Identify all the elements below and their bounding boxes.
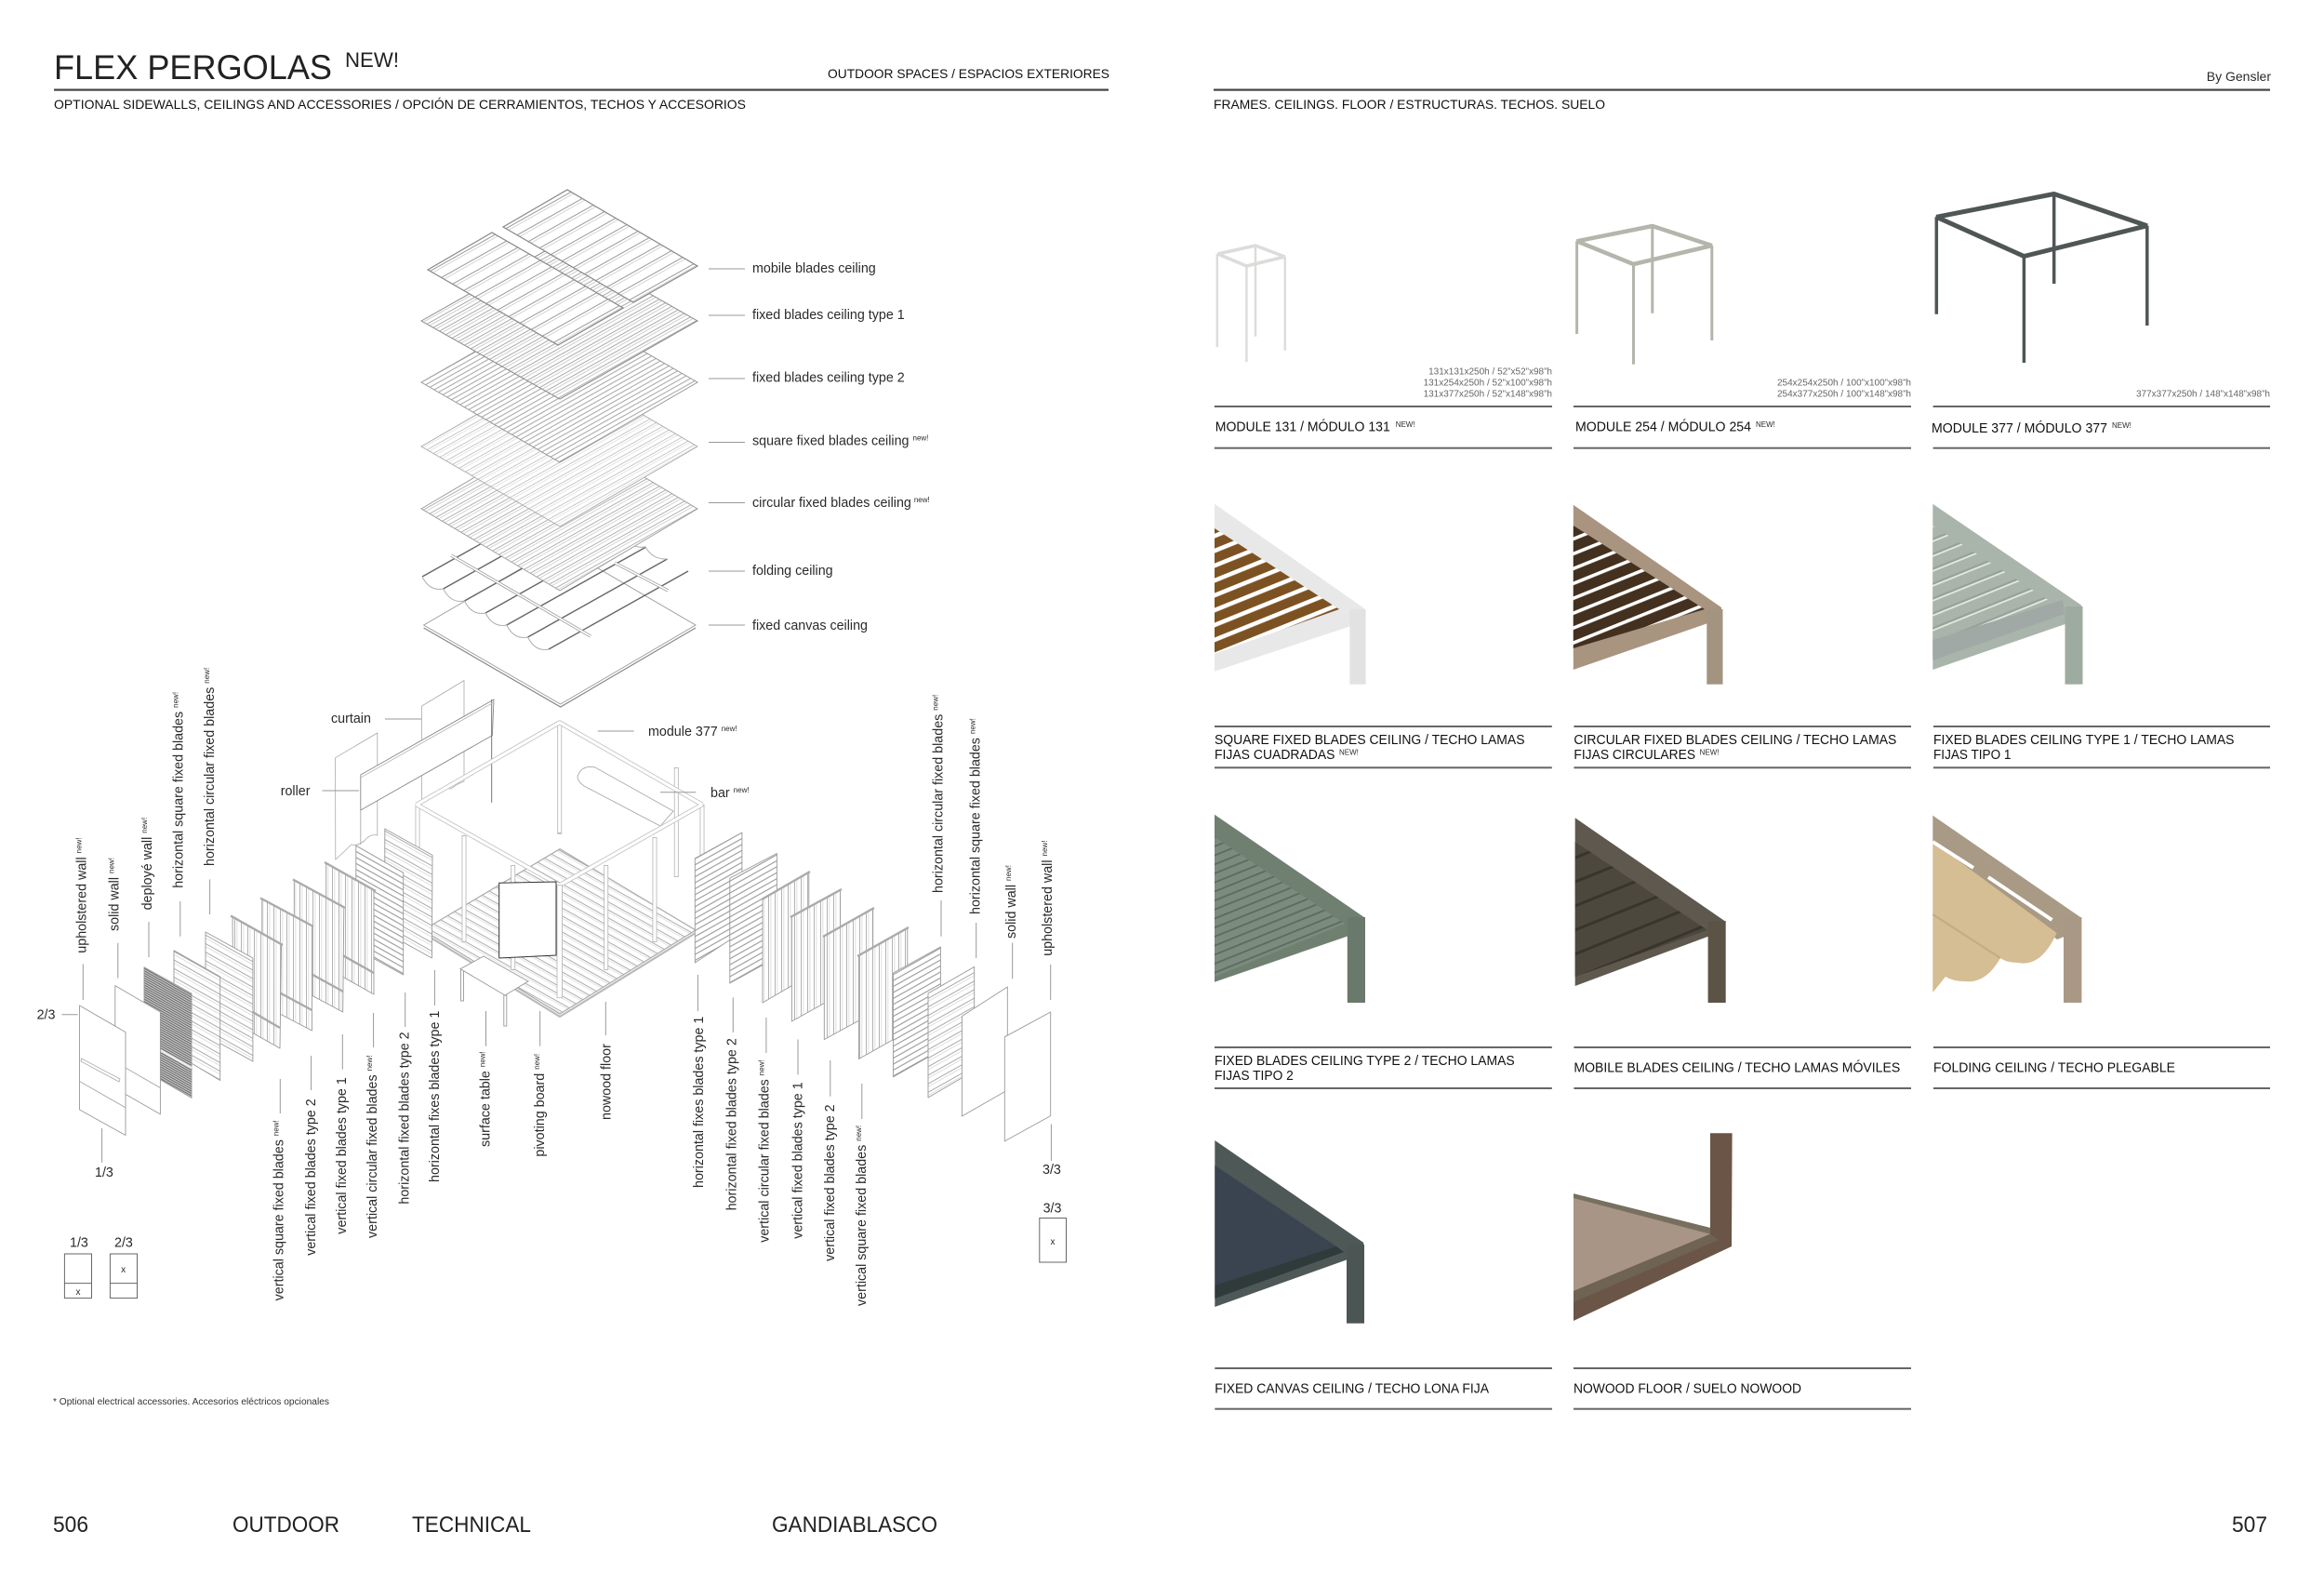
label: vertical fixed blades type 2: vertical fixed blades type 2 <box>304 1099 319 1256</box>
label: bar: bar <box>710 786 730 801</box>
surface table <box>460 956 528 1026</box>
page number 506: 506 <box>53 1512 88 1538</box>
front post <box>557 886 562 998</box>
rear posts <box>418 723 702 970</box>
pergola module with floor and accessories <box>336 681 702 1026</box>
nowood floor card <box>1574 1133 1911 1410</box>
wall position legend <box>64 1202 1066 1299</box>
folding ceiling card <box>1932 816 2270 1089</box>
label: horizontal square fixed blades: new! <box>969 718 976 734</box>
module 254 card <box>1574 225 1911 449</box>
square fixed blades ceiling card <box>1215 504 1552 768</box>
label: horizontal circular fixed blades: new! <box>931 695 939 711</box>
fixed blades ceiling type 2 plate <box>421 303 697 462</box>
designer credit: By Gensler <box>2207 69 2271 84</box>
label: circular fixed blades ceiling: new! <box>914 496 930 504</box>
rules <box>1933 406 2270 449</box>
label: module 377: module 377 <box>648 725 718 739</box>
label: vertical square fixed blades: new! <box>855 1125 863 1141</box>
label: solid wall: new! <box>108 858 116 873</box>
caption: FIXED BLADES CEILING TYPE 2 / TECHO LAMAS <box>1215 1054 1515 1069</box>
label: surface table: surface table <box>479 1071 494 1147</box>
vertical circular fixed blades panel <box>325 862 376 994</box>
roller <box>361 699 494 845</box>
label: vertical circular fixed blades: vertical circular fixed blades <box>365 1074 380 1238</box>
left wall labels <box>37 668 548 1300</box>
label: 2/3: 2/3 <box>37 1008 56 1023</box>
legend 2/3 <box>110 1235 138 1299</box>
render <box>1215 504 1366 685</box>
caption: CIRCULAR FIXED BLADES CEILING / TECHO LAMAS <box>1574 733 1896 748</box>
label: pivoting board: pivoting board <box>533 1073 548 1157</box>
render <box>1932 816 2081 1003</box>
label: vertical fixed blades type 1: vertical fixed blades type 1 <box>790 1082 805 1239</box>
frame 377 <box>1936 193 2147 363</box>
label: square fixed blades ceiling: new! <box>913 433 928 443</box>
rules <box>1574 726 1911 768</box>
sizes <box>1777 378 1911 399</box>
label: pivoting board <box>533 1011 548 1157</box>
folding ceiling <box>422 499 688 649</box>
vertical circular fixed blades panel <box>762 872 810 1003</box>
frame 131 <box>1217 246 1285 362</box>
new badge: NEW! <box>1396 420 1415 429</box>
label: vertical fixed blades type 2: vertical fixed blades type 2 <box>823 1104 838 1261</box>
header rule <box>54 89 1109 91</box>
horizontal fixed blades type 2 panel <box>730 854 777 983</box>
label: vertical square fixed blades: vertical square fixed blades <box>855 1145 870 1306</box>
pivoting board <box>499 882 556 958</box>
frame 254 <box>1577 225 1712 365</box>
render <box>1215 815 1365 1003</box>
label: 1/3 <box>95 1128 113 1180</box>
upholstered wall panel <box>1004 1012 1051 1141</box>
mobile blades ceiling card <box>1574 818 1911 1089</box>
section TECHNICAL: TECHNICAL <box>412 1512 531 1538</box>
label: upholstered wall: upholstered wall <box>1041 859 1056 956</box>
label: solid wall <box>108 858 123 979</box>
fixed canvas ceiling card <box>1215 1140 1552 1410</box>
label: nowood floor <box>599 1002 614 1120</box>
label: upholstered wall: new! <box>74 837 83 853</box>
label: roller <box>281 784 359 799</box>
label: mobile blades ceiling: mobile blades ceiling <box>752 261 876 276</box>
label: fixed blades ceiling type 1: fixed blades ceiling type 1 <box>752 308 905 323</box>
sizes: 254x254x250h / 100”x100”x98”h <box>1777 378 1911 388</box>
label: folding ceiling <box>709 564 833 579</box>
label: vertical square fixed blades: new! <box>272 1120 280 1136</box>
caption: MODULE 377 / MÓDULO 377 <box>1932 420 2107 436</box>
label: horizontal circular fixed blades: horizontal circular fixed blades <box>203 687 218 866</box>
sizes: 131x131x250h / 52”x52”x98”h <box>1428 366 1552 377</box>
post highlights <box>418 724 702 969</box>
label: roller: roller <box>281 784 311 799</box>
label: upholstered wall <box>1041 841 1056 1000</box>
caption: SQUARE FIXED BLADES CEILING / TECHO LAMAS <box>1215 733 1525 748</box>
rules <box>1215 406 1552 449</box>
label: bar <box>660 786 750 801</box>
rules <box>1215 726 1552 768</box>
sizes: 131x377x250h / 52”x148”x98”h <box>1424 389 1552 399</box>
caption: FIJAS TIPO 1 <box>1933 748 2011 763</box>
caption: FIJAS TIPO 2 <box>1215 1069 1294 1084</box>
vertical square fixed blades panel <box>231 915 283 1048</box>
label: circular fixed blades ceiling: circular fixed blades ceiling <box>752 496 911 511</box>
caption: FOLDING CEILING / TECHO PLEGABLE <box>1933 1061 2175 1076</box>
bar <box>578 766 673 826</box>
new badge: NEW! <box>2112 421 2131 430</box>
horizontal fixes blades type 1 panel <box>385 829 432 958</box>
label: horizontal circular fixed blades: new! <box>203 668 211 684</box>
fixed blades ceiling type 2 card <box>1215 815 1552 1089</box>
label: pivoting board: new! <box>533 1054 541 1070</box>
subtitle: OPTIONAL SIDEWALLS, CEILINGS AND ACCESSORIES / OPCIÓN DE CERRAMIENTOS, TECHOS Y ACCESORIOS <box>54 97 746 112</box>
label: vertical fixed blades type 1: vertical fixed blades type 1 <box>335 1077 350 1234</box>
caption: NOWOOD FLOOR / SUELO NOWOOD <box>1574 1382 1801 1397</box>
label: surface table: new! <box>479 1051 487 1067</box>
mobile blades ceiling left module <box>428 233 623 345</box>
caption: FIJAS CUADRADAS <box>1215 748 1335 763</box>
module 377 card <box>1932 193 2270 449</box>
label: upholstered wall: upholstered wall <box>74 857 89 953</box>
label: horizontal fixes blades type 1: horizontal fixes blades type 1 <box>428 1011 443 1182</box>
solid wall panel <box>115 986 160 1114</box>
label: solid wall: solid wall <box>108 877 123 931</box>
label: deployé wall <box>140 818 155 957</box>
label: vertical circular fixed blades: vertical circular fixed blades <box>758 1079 773 1243</box>
legend 2/3: 2/3 <box>114 1235 133 1250</box>
legend 1/3: x <box>76 1287 80 1298</box>
label: surface table <box>479 1011 494 1147</box>
caption <box>1574 733 1896 763</box>
vertical fixed blades type 2 panel <box>823 908 874 1040</box>
page number 507: 507 <box>2232 1512 2267 1538</box>
vertical fixed blades type 1 panel <box>293 880 345 1012</box>
rules <box>1574 1046 1911 1089</box>
sizes: 254x377x250h / 100”x148”x98”h <box>1777 389 1911 399</box>
label: horizontal fixes blades type 1: horizontal fixes blades type 1 <box>692 1017 707 1188</box>
label: horizontal fixed blades type 2: horizontal fixed blades type 2 <box>398 1032 413 1205</box>
curtain panels <box>336 681 464 859</box>
floor front edges <box>423 933 696 1017</box>
legend 1/3: 1/3 <box>70 1235 88 1250</box>
caption: NEW! <box>1700 749 1719 757</box>
render <box>1575 818 1726 1003</box>
caption: MOBILE BLADES CEILING / TECHO LAMAS MÓVILES <box>1574 1060 1900 1076</box>
label: horizontal square fixed blades: new! <box>171 692 180 708</box>
label: solid wall: solid wall <box>1004 885 1019 939</box>
circular fixed blades ceiling plate <box>421 427 697 591</box>
label: fixed canvas ceiling: fixed canvas ceiling <box>752 619 868 633</box>
right page header <box>1214 69 2271 112</box>
caption <box>1933 733 2234 763</box>
rules <box>1933 726 2270 768</box>
right side wall panels <box>695 832 1051 1141</box>
label: folding ceiling: folding ceiling <box>752 564 833 579</box>
label: module 377 <box>598 725 737 739</box>
sizes: 131x254x250h / 52”x100”x98”h <box>1424 378 1552 388</box>
frame top ring outer <box>417 723 702 886</box>
caption: FIJAS CIRCULARES <box>1574 748 1695 763</box>
label: 2/3 <box>37 1008 78 1023</box>
caption: MODULE 131 / MÓDULO 131 <box>1215 419 1390 434</box>
subtitle: FRAMES. CEILINGS. FLOOR / ESTRUCTURAS. TECHOS. SUELO <box>1214 97 1605 112</box>
legend 3/3: x <box>1051 1237 1055 1247</box>
title: FLEX PERGOLAS <box>54 48 332 87</box>
mobile blades ceiling right module <box>503 190 697 302</box>
section OUTDOOR: OUTDOOR <box>232 1512 339 1538</box>
rules <box>1215 1046 1552 1089</box>
label: horizontal fixed blades type 2: horizontal fixed blades type 2 <box>724 1038 739 1210</box>
exploded ceiling stack <box>421 190 697 707</box>
rules <box>1574 406 1911 449</box>
caption <box>1215 733 1525 763</box>
vertical fixed blades type 1 panel <box>790 889 842 1021</box>
horizontal square fixed blades panel <box>174 951 220 1081</box>
vertical fixed blades type 2 panel <box>260 899 313 1031</box>
label: vertical circular fixed blades: new! <box>758 1059 766 1075</box>
label: deployé wall: new! <box>140 818 149 833</box>
label: curtain <box>331 712 421 726</box>
label: vertical square fixed blades: vertical square fixed blades <box>272 1139 286 1300</box>
section label: OUTDOOR SPACES / ESPACIOS EXTERIORES <box>828 66 1109 81</box>
new badge: NEW! <box>1756 420 1775 429</box>
label: 3/3 <box>1042 1125 1061 1178</box>
label: fixed blades ceiling type 2: fixed blades ceiling type 2 <box>752 370 905 385</box>
rules <box>1215 1367 1552 1410</box>
fixed canvas ceiling plate <box>424 546 696 707</box>
legend 1/3 <box>64 1235 91 1299</box>
label: solid wall <box>1004 865 1019 979</box>
left side wall panels <box>80 829 432 1135</box>
vertical square fixed blades panel <box>857 927 909 1059</box>
caption: NEW! <box>1339 749 1359 757</box>
fixed blades ceiling type 1 plate <box>421 243 697 399</box>
module and accessory labels <box>281 712 750 801</box>
label: solid wall: new! <box>1004 865 1013 881</box>
legend 2/3: x <box>121 1265 126 1275</box>
rules <box>1574 1367 1911 1410</box>
render <box>1574 505 1722 685</box>
render <box>1574 1133 1733 1321</box>
circular fixed blades ceiling card <box>1574 505 1911 768</box>
horizontal circular fixed blades panel <box>206 932 253 1061</box>
legend 3/3 <box>1040 1202 1066 1262</box>
label: horizontal square fixed blades: horizontal square fixed blades <box>969 738 984 914</box>
render <box>1932 504 2083 685</box>
new badge: NEW! <box>345 48 399 72</box>
caption: FIXED CANVAS CEILING / TECHO LONA FIJA <box>1215 1382 1489 1397</box>
caption: MODULE 254 / MÓDULO 254 <box>1575 419 1751 434</box>
square fixed blades ceiling plate <box>421 366 697 526</box>
label: nowood floor: nowood floor <box>599 1044 614 1120</box>
rules <box>1933 1046 2270 1089</box>
horizontal fixes blades type 1 panel <box>695 832 742 963</box>
frame top ring inner <box>417 723 702 886</box>
label: module 377: new! <box>722 725 737 733</box>
brand: GANDIABLASCO <box>772 1512 937 1538</box>
header rule <box>1214 89 2270 91</box>
caption: FIXED BLADES CEILING TYPE 1 / TECHO LAMAS <box>1933 733 2234 748</box>
label: upholstered wall: new! <box>1041 841 1049 856</box>
label: deployé wall: deployé wall <box>140 837 155 910</box>
right wall labels <box>599 695 1061 1306</box>
deployé wall panel <box>144 967 192 1098</box>
label: vertical circular fixed blades: new! <box>365 1055 374 1071</box>
upholstered wall panel <box>80 1006 126 1135</box>
label: 3/3: 3/3 <box>1042 1163 1061 1178</box>
label: horizontal circular fixed blades: horizontal circular fixed blades <box>931 714 946 893</box>
footnote: * Optional electrical accessories. Accesorios eléctricos opcionales <box>53 1397 329 1407</box>
label: curtain: curtain <box>331 712 371 726</box>
solid wall panel <box>962 987 1007 1116</box>
ceiling labels <box>709 261 930 633</box>
label: 1/3: 1/3 <box>95 1165 113 1180</box>
horizontal circular fixed blades panel <box>893 947 940 1077</box>
horizontal square fixed blades panel <box>928 966 975 1098</box>
label: bar: new! <box>734 786 750 794</box>
render <box>1215 1140 1364 1324</box>
label: upholstered wall <box>74 837 89 1000</box>
module 131 card <box>1215 246 1552 449</box>
size: 377x377x250h / 148”x148”x98”h <box>2136 389 2270 399</box>
nowood floor <box>423 849 696 1014</box>
fixed blades ceiling type 1 card <box>1932 504 2270 768</box>
caption <box>1215 1054 1515 1084</box>
horizontal fixed blades type 2 panel <box>356 846 404 975</box>
label: square fixed blades ceiling: square fixed blades ceiling <box>752 433 910 448</box>
footer <box>53 1512 2267 1538</box>
label: horizontal square fixed blades: horizontal square fixed blades <box>171 712 186 888</box>
legend 3/3: 3/3 <box>1043 1202 1062 1217</box>
left page header <box>54 48 1109 112</box>
sizes <box>1424 366 1552 399</box>
